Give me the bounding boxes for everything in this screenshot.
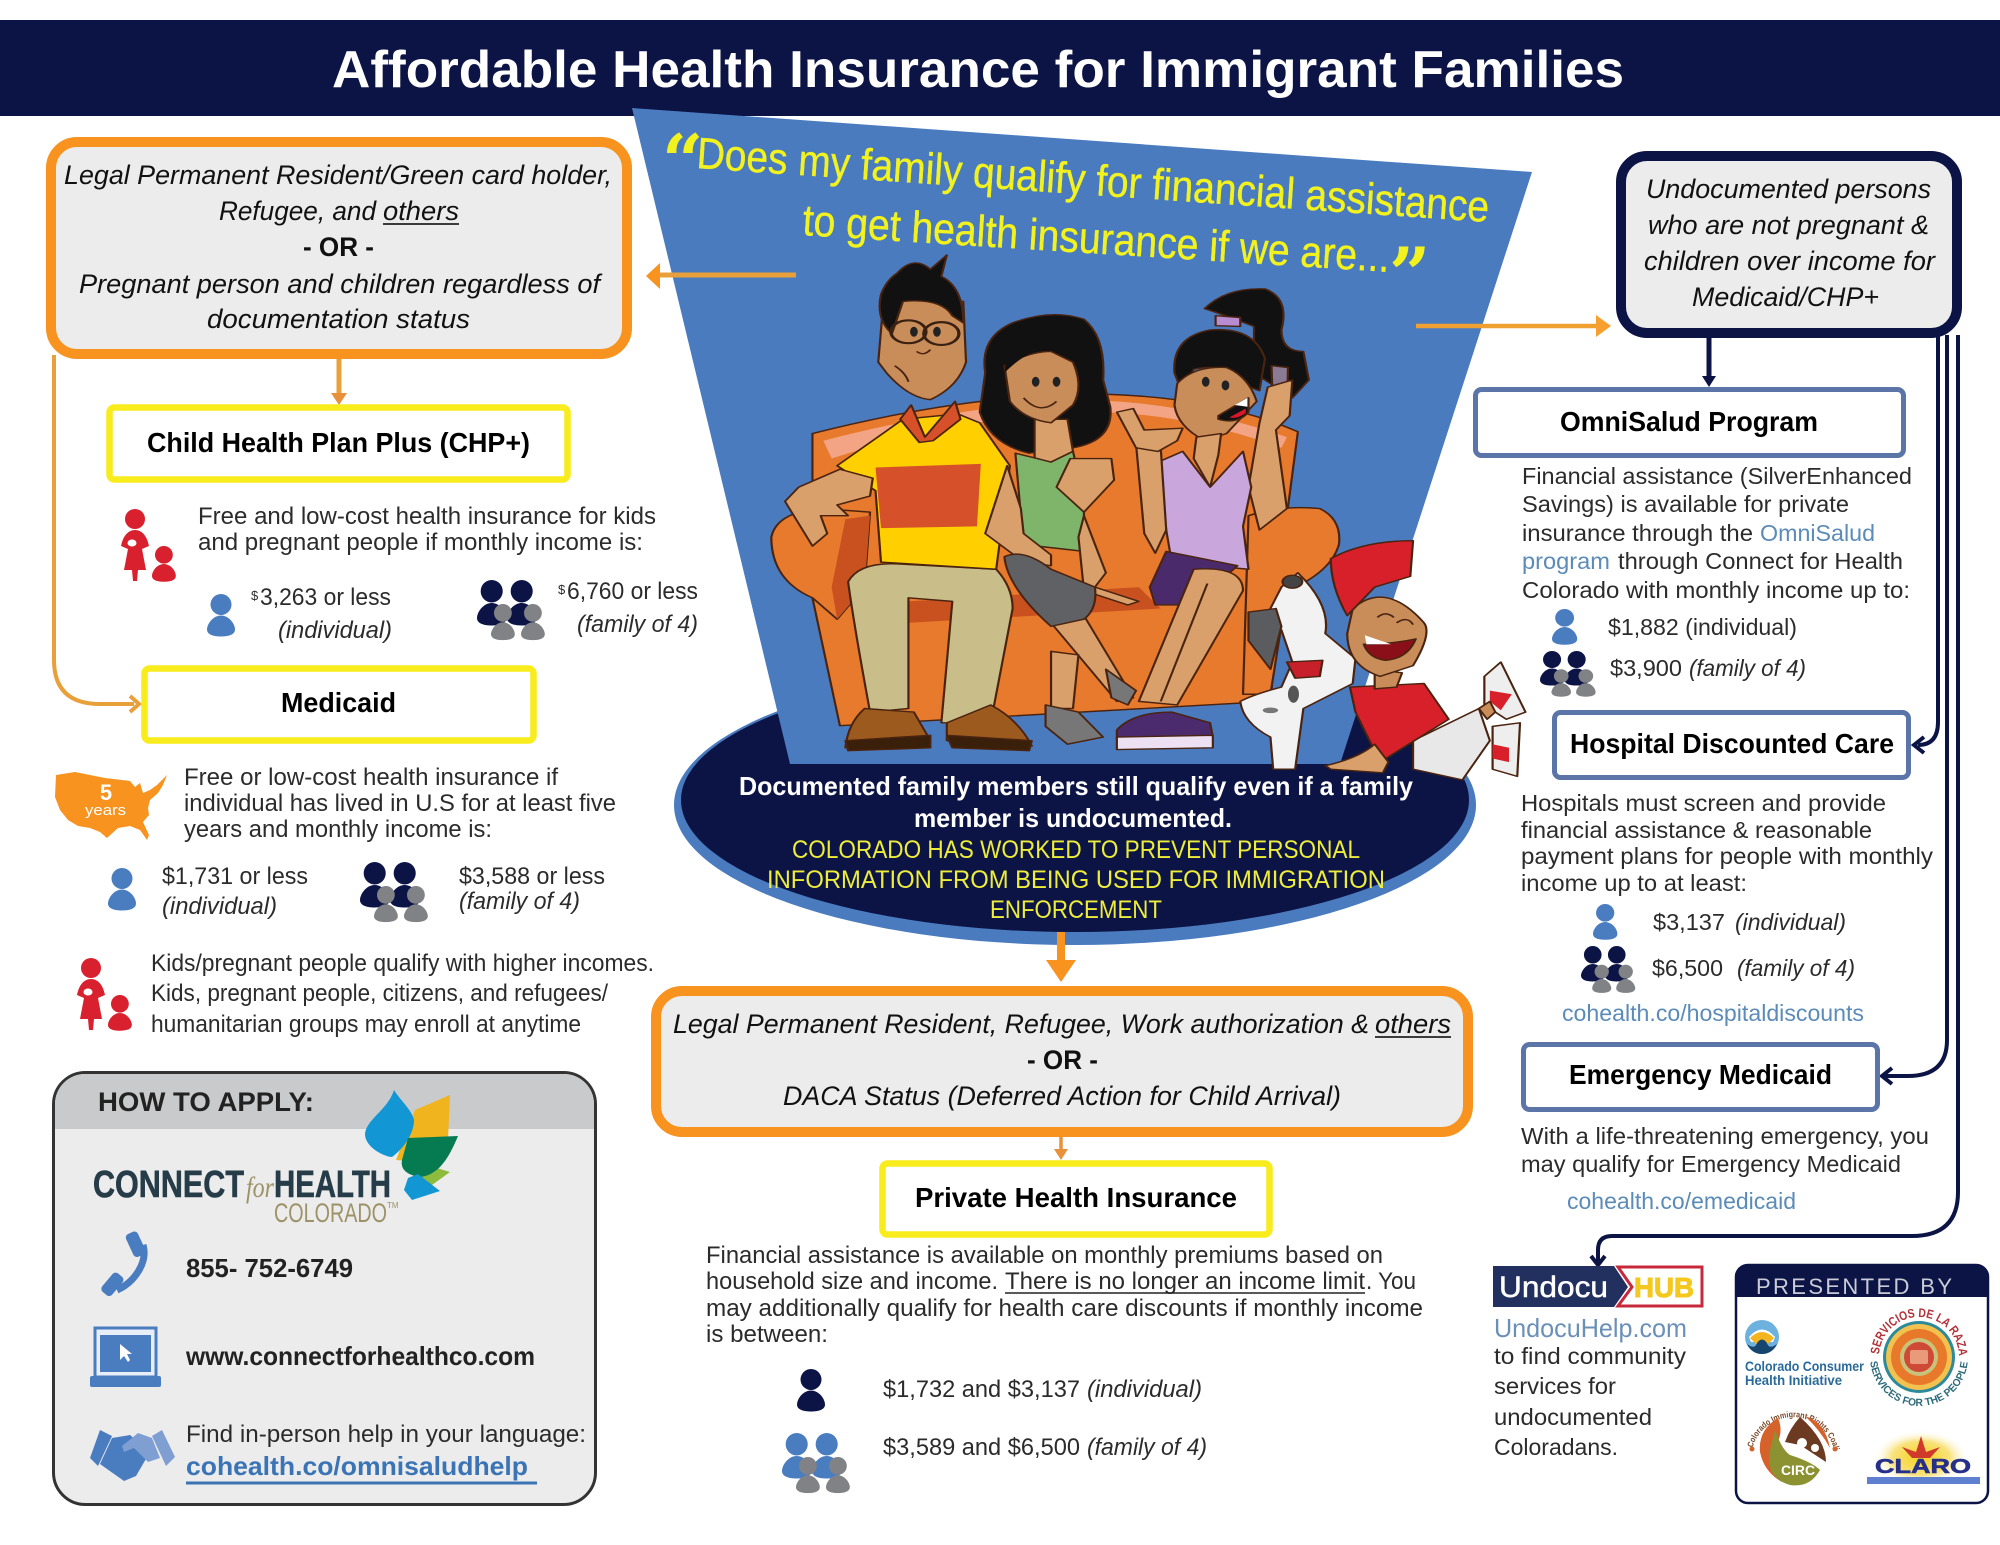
OmniSalud description: Financial assistance (SilverEnhanced: [1522, 463, 1912, 489]
OmniSalud description: insurance through the: [1522, 520, 1753, 546]
quote heading: to get health insurance if we are...: [801, 196, 1391, 282]
icon: individual: [207, 594, 235, 636]
panel: lower eligibility box: others: [1375, 1009, 1451, 1039]
woman: [980, 315, 1139, 744]
link: emergency medicaid: cohealth.co/emedicaid: [1567, 1188, 1796, 1214]
CHP+ individual income: [251, 584, 392, 644]
OmniSalud description: Colorado with monthly income up to:: [1522, 577, 1910, 603]
Medicaid enrolment note: [151, 950, 654, 1038]
panel: undocumented persons box: Undocumented persons: [1646, 174, 1931, 204]
icon: family of four: [477, 580, 545, 640]
arrow: undocumented box to emergency medicaid: [1882, 335, 1947, 1084]
Hospital description: [1521, 790, 1934, 896]
panel: undocumented persons box: children over income for: [1644, 246, 1936, 276]
in-person help text: [186, 1421, 586, 1483]
icon: individual: [1593, 904, 1617, 940]
private insurance description: household size and income.: [706, 1268, 998, 1295]
OmniSalud description: through Connect for Health: [1618, 548, 1903, 574]
arrow: ellipse down to lower box: [1046, 932, 1076, 982]
OmniSalud description: OmniSalud: [1760, 520, 1875, 546]
Emergency Medicaid description: may qualify for Emergency Medicaid: [1521, 1151, 1901, 1177]
Medicaid enrolment note: humanitarian groups may enroll at anytime: [151, 1011, 581, 1038]
private insurance description: may additionally qualify for health care discounts if monthly income: [706, 1295, 1423, 1322]
Hospital individual income: $3,137: [1653, 909, 1725, 935]
UndocuHelp text block: Coloradans.: [1494, 1434, 1618, 1460]
private individual income: (individual): [1087, 1376, 1202, 1403]
Hospital individual income: (individual): [1735, 909, 1846, 935]
logo: Colorado Consumer Health Initiative: Health Initiative: [1745, 1372, 1842, 1388]
logo: wordmark: TM: [387, 1201, 399, 1210]
private insurance description: . You: [1366, 1268, 1416, 1295]
logo: Colorado Consumer Health Initiative: Colorado Consumer: [1745, 1358, 1864, 1374]
man: [785, 255, 1032, 751]
phone number: 855- 752-6749: [186, 1253, 353, 1283]
icon: individual: [797, 1369, 825, 1412]
Hospital family income: (family of 4): [1737, 955, 1855, 981]
icon: phone: [100, 1230, 147, 1298]
OmniSalud individual income: $1,882 (individual): [1608, 614, 1797, 640]
UndocuHelp text block: UndocuHelp.com: [1494, 1313, 1687, 1343]
Medicaid enrolment note: Kids/pregnant people qualify with higher incomes.: [151, 950, 654, 977]
icon: individual: [108, 868, 136, 910]
private family income: [883, 1434, 1207, 1461]
UndocuHelp text block: to find community: [1494, 1343, 1687, 1369]
link: hospital discounts: cohealth.co/hospitaldiscounts: [1562, 1000, 1864, 1026]
sofa: [771, 394, 1339, 726]
arrow: quote to undocumented box: [1416, 315, 1611, 337]
arrow: lower box to private insurance: [1054, 1137, 1068, 1160]
panel: lower eligibility box: Legal Permanent Resident, Refugee, Work authorization &: [673, 1009, 1369, 1039]
logo: Colorado Consumer Health Initiative: [1745, 1320, 1864, 1388]
CHP+ description: Free and low-cost health insurance for kids: [198, 503, 656, 530]
quote heading: “: [662, 118, 703, 203]
panel: Hospital Discounted Care heading: [1554, 712, 1908, 778]
Hospital description: income up to at least:: [1521, 870, 1747, 896]
OmniSalud description: [1522, 463, 1912, 603]
panel: Medicaid heading: [144, 668, 534, 740]
logo: wordmark: HEALTH: [274, 1164, 391, 1206]
Medicaid family income: $3,588 or less: [459, 863, 605, 890]
panel: how to apply: [54, 1072, 596, 1504]
arrow: left box to Medicaid: [54, 355, 139, 712]
Medicaid description: [184, 764, 616, 843]
panel: left eligibility box: Legal Permanent Resident/Green card holder,: [64, 160, 612, 190]
logo: UndocuHub: Undocu: [1499, 1271, 1608, 1304]
icon: individual: [1552, 609, 1577, 645]
girl: [1117, 289, 1309, 750]
Emergency Medicaid description: With a life-threatening emergency, you: [1521, 1123, 1929, 1149]
Medicaid individual income: (individual): [162, 893, 277, 920]
CHP+ individual income: (individual): [278, 617, 392, 644]
Hospital description: financial assistance & reasonable: [1521, 817, 1872, 843]
arrow: left box to CHP+: [331, 359, 347, 405]
dark ellipse text: [739, 771, 1414, 924]
icon: family of four: [1581, 946, 1635, 993]
arrow: quote to left eligibility box: [646, 263, 796, 289]
CHP+ family income: $: [558, 582, 566, 597]
quote heading: ”: [1389, 231, 1430, 316]
quote heading: [662, 118, 1491, 316]
icon: laptop: [90, 1328, 161, 1387]
Medicaid description: years and monthly income is:: [184, 816, 492, 843]
icon: family of four: [782, 1433, 850, 1493]
panel: private health insurance heading: [882, 1164, 1270, 1234]
logo: wordmark: [93, 1164, 399, 1228]
panel: Emergency Medicaid heading: [1524, 1044, 1878, 1110]
CHP+ description: and pregnant people if monthly income is:: [198, 529, 643, 556]
Hospital description: payment plans for people with monthly: [1521, 843, 1934, 869]
logo: Servicios de la Raza: SERVICES FOR THE PEOPLE: [1870, 1361, 1968, 1406]
quote heading: Does my family qualify for financial assistance: [695, 129, 1491, 232]
icon: US map five years: years: [85, 802, 126, 819]
panel: central question trapezoid: [632, 108, 1532, 764]
Medicaid individual income: $1,731 or less: [162, 863, 308, 890]
private individual income: $1,732 and $3,137: [883, 1376, 1080, 1403]
boy: [1325, 541, 1525, 780]
icon: US map five years: 5: [100, 780, 112, 805]
icon: family of four: [360, 862, 428, 922]
panel: Medicaid heading: Medicaid: [281, 687, 396, 718]
CHP+ family income: [558, 578, 698, 638]
icon: family of four: [1540, 651, 1596, 697]
Hospital family income: [1652, 955, 1855, 981]
OmniSalud description: program: [1522, 548, 1610, 574]
logo: wordmark: CONNECT: [93, 1164, 244, 1206]
logo: CLARO: CLARO: [1875, 1456, 1971, 1478]
panel: left eligibility box: others: [383, 196, 459, 226]
panel: OmniSalud heading: [1476, 390, 1904, 456]
OmniSalud description: Savings) is available for private: [1522, 491, 1849, 517]
CHP+ family income: 6,760 or less: [567, 578, 698, 605]
panel: Emergency Medicaid heading: Emergency Medicaid: [1569, 1059, 1832, 1090]
UndocuHelp text block: [1494, 1313, 1687, 1460]
in-person help text: cohealth.co/omnisaludhelp: [186, 1451, 528, 1481]
Hospital description: Hospitals must screen and provide: [1521, 790, 1886, 816]
panel: lower eligibility box: - OR -: [1027, 1045, 1098, 1075]
in-person help text: Find in-person help in your language:: [186, 1421, 586, 1448]
Medicaid individual income: [162, 863, 308, 920]
private insurance description: [706, 1242, 1423, 1348]
private insurance description: Financial assistance is available on monthly premiums based on: [706, 1242, 1383, 1269]
arrow: undocumented box to UndocuHub: [1591, 335, 1958, 1265]
title banner: [0, 20, 2000, 116]
panel: CHP+ heading: [110, 408, 568, 480]
OmniSalud family income: [1610, 655, 1806, 681]
icon: handshake: [90, 1430, 175, 1481]
arrow: undocumented box to OmniSalud: [1702, 338, 1716, 387]
CHP+ individual income: 3,263 or less: [260, 584, 391, 611]
private family income: (family of 4): [1087, 1434, 1207, 1461]
dark ellipse text: ENFORCEMENT: [990, 896, 1162, 924]
Medicaid enrolment note: Kids, pregnant people, citizens, and refugees/: [151, 980, 608, 1007]
heading: HOW TO APPLY:: [98, 1087, 314, 1117]
dark ellipse text: member is undocumented.: [914, 803, 1232, 833]
CHP+ family income: (family of 4): [577, 611, 698, 638]
logo: Servicios de la Raza: SERVICIOS DE LA RAZA: [1870, 1308, 1968, 1356]
dog: [1240, 573, 1355, 769]
panel: undocumented persons box: who are not pregnant &: [1648, 210, 1929, 240]
icon: pregnant person and child: [77, 958, 132, 1031]
Emergency Medicaid description: [1521, 1123, 1929, 1177]
Medicaid family income: (family of 4): [459, 888, 580, 915]
Hospital family income: $6,500: [1652, 955, 1723, 981]
OmniSalud family income: $3,900: [1610, 655, 1682, 681]
private insurance description: is between:: [706, 1321, 828, 1348]
Hospital individual income: [1653, 909, 1846, 935]
logo: Servicios de la Raza: [1870, 1308, 1968, 1406]
CHP+ individual income: $: [251, 588, 259, 603]
Medicaid description: individual has lived in U.S for at least five: [184, 790, 616, 817]
panel: private health insurance heading: Private Health Insurance: [915, 1182, 1237, 1213]
icon: US map five years: [55, 772, 167, 840]
panel: undocumented persons box: Medicaid/CHP+: [1692, 282, 1879, 312]
panel: lower eligibility box: DACA Status (Deferred Action for Child Arrival): [783, 1081, 1341, 1111]
logo: CIRC: CIRC: [1781, 1462, 1815, 1478]
logo: wordmark: for: [246, 1171, 274, 1204]
panel: left eligibility box: - OR -: [303, 232, 374, 262]
logo: CIRC: Colorado Immigrant Rights Coalition: [1748, 1411, 1840, 1450]
private family income: $3,589 and $6,500: [883, 1434, 1080, 1461]
panel: left eligibility box: [51, 142, 627, 354]
private insurance description: There is no longer an income limit: [1005, 1268, 1365, 1295]
panel: dark ellipse: [674, 665, 1476, 945]
Medicaid family income: [459, 863, 605, 915]
panel: left eligibility box: Pregnant person and children regardless of: [79, 269, 603, 299]
website: www.connectforhealthco.com: [185, 1341, 535, 1371]
Medicaid description: Free or low-cost health insurance if: [184, 764, 558, 791]
panel: left eligibility box: documentation status: [207, 304, 470, 334]
panel: OmniSalud heading: OmniSalud Program: [1560, 406, 1818, 437]
private individual income: [883, 1376, 1202, 1403]
dark ellipse text: COLORADO HAS WORKED TO PREVENT PERSONAL: [792, 836, 1360, 864]
UndocuHelp text block: services for: [1494, 1373, 1616, 1399]
UndocuHelp text block: undocumented: [1494, 1404, 1652, 1430]
illustration: family on sofa: [771, 255, 1525, 780]
logo: UndocuHub: [1493, 1266, 1702, 1307]
arrow: undocumented box to hospital discounted care: [1914, 335, 1938, 753]
panel: CHP+ heading: Child Health Plan Plus (CHP+): [147, 427, 530, 458]
logo: leaves: [365, 1090, 458, 1200]
dark ellipse text: INFORMATION FROM BEING USED FOR IMMIGRATION: [767, 866, 1385, 894]
panel: presented by: PRESENTED BY: [1756, 1274, 1952, 1299]
panel: left eligibility box: Refugee, and: [219, 196, 377, 226]
logo: CLARO: [1867, 1430, 1980, 1486]
OmniSalud family income: (family of 4): [1689, 655, 1806, 681]
dark ellipse text: Documented family members still qualify even if a family: [739, 771, 1414, 801]
icon: pregnant person and child: [121, 509, 176, 582]
title banner: Affordable Health Insurance for Immigrant Families: [332, 41, 1624, 99]
panel: lower eligibility box: [656, 991, 1468, 1132]
CHP+ description: [198, 503, 656, 556]
logo: UndocuHub: HUB: [1634, 1272, 1694, 1303]
logo: wordmark: COLORADO: [274, 1198, 387, 1228]
panel: Hospital Discounted Care heading: Hospital Discounted Care: [1570, 728, 1894, 759]
panel: undocumented persons box: [1621, 156, 1957, 333]
